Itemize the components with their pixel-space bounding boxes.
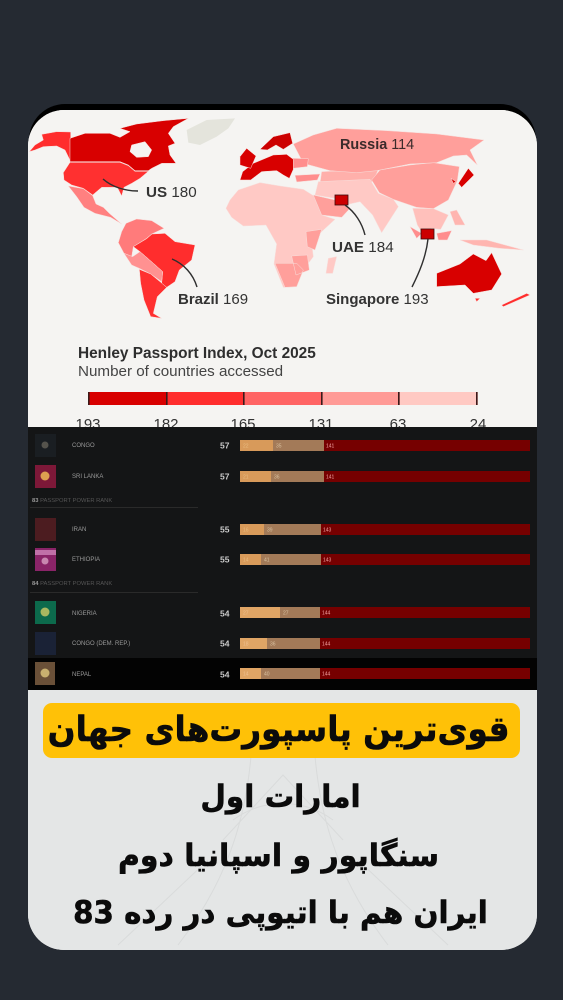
- row: Iran: 55: [220, 524, 230, 534]
- title: قوی‌ترین پاسپورت‌های جهان: [48, 710, 509, 750]
- headline line 2: سنگاپور و اسپانیا دوم: [118, 838, 439, 874]
- row: Congo Dem. Rep.: 54: [220, 638, 230, 648]
- row: Congo: [35, 434, 530, 457]
- black top edge behind card: [29, 104, 536, 184]
- panel: Persian headline area: [28, 690, 537, 950]
- rank heading 84: 84 PASSPORT POWER RANK: [32, 581, 112, 587]
- panel: world map with legend: [28, 110, 537, 427]
- row: Congo: 141: [326, 444, 335, 450]
- headline line 1: امارات اول: [200, 779, 361, 815]
- row: Nigeria: 27: [283, 610, 289, 616]
- row: Sri Lanka: 57: [220, 472, 230, 482]
- callout: Russia: Russia 114: [340, 137, 414, 153]
- row: Iran: [35, 518, 530, 541]
- row: Ethiopia: ETHIOPIA: [72, 557, 100, 563]
- row: Congo: 35: [276, 444, 282, 450]
- row: Congo Dem. Rep.: 144: [322, 642, 331, 648]
- rank heading 83: 83 PASSPORT POWER RANK: [32, 498, 112, 504]
- row: Congo: 57: [220, 440, 230, 450]
- row: Congo Dem. Rep.: 36: [270, 642, 276, 648]
- row: Sri Lanka: 21: [243, 474, 249, 480]
- row: Nepal: 54: [220, 670, 230, 680]
- callout: Brazil: Brazil 169: [178, 291, 248, 308]
- row: Nepal: 40: [264, 672, 270, 678]
- row: Congo: 22: [243, 444, 249, 450]
- callout: Brazil: [172, 259, 248, 308]
- legend colour scale: [88, 392, 478, 405]
- row: Nepal: NEPAL: [72, 672, 92, 678]
- legend subheading: Number of countries accessed: [78, 363, 283, 380]
- row: Sri Lanka: SRI LANKA: [72, 474, 103, 480]
- row: Congo Dem. Rep.: CONGO (DEM. REP.): [72, 641, 130, 647]
- row: Iran: IRAN: [72, 527, 86, 533]
- legend heading: Henley Passport Index, Oct 2025: [78, 345, 316, 362]
- callout: UAE: UAE 184: [332, 239, 394, 256]
- row: Sri Lanka: 141: [326, 474, 335, 480]
- decorative tower lines: [118, 758, 448, 945]
- row: Nepal: [35, 662, 530, 685]
- row: Iran: 39: [267, 528, 273, 534]
- row: Nigeria: NIGERIA: [72, 611, 97, 617]
- row: Nigeria: 54: [220, 608, 230, 618]
- legend values: [75, 416, 486, 433]
- row: Ethiopia: [35, 548, 530, 571]
- row: Nigeria: 27: [243, 610, 249, 616]
- row: Sri Lanka: 36: [274, 474, 280, 480]
- row: Sri Lanka: [35, 465, 530, 488]
- row: Ethiopia: 14: [243, 558, 249, 564]
- main card: [28, 110, 537, 950]
- row: Congo: CONGO: [72, 443, 95, 449]
- yellow title banner: [43, 703, 520, 758]
- row: Ethiopia: 41: [264, 558, 270, 564]
- row: Ethiopia: 143: [323, 558, 332, 564]
- row: Iran: 16: [243, 528, 249, 534]
- callout: Singapore: [326, 229, 434, 308]
- headline line 3: ایران هم با اتیوپی در رده 83: [73, 895, 488, 931]
- row: Congo Dem. Rep.: [35, 632, 530, 655]
- row: Iran: 143: [323, 528, 332, 534]
- row: Nigeria: 144: [322, 610, 331, 616]
- world map countries: [29, 118, 530, 318]
- row: Nigeria: [35, 601, 530, 624]
- row: Congo Dem. Rep.: 18: [243, 642, 249, 648]
- callout: US: [103, 179, 197, 201]
- panel: passport rank table: [28, 427, 537, 690]
- callout: UAE: [332, 195, 394, 256]
- row: Nepal: 14: [243, 672, 249, 678]
- callout: Singapore: Singapore 193: [326, 291, 429, 308]
- row: Nepal: 144: [322, 672, 331, 678]
- callout: US: US 180: [146, 184, 197, 201]
- row: Ethiopia: 55: [220, 554, 230, 564]
